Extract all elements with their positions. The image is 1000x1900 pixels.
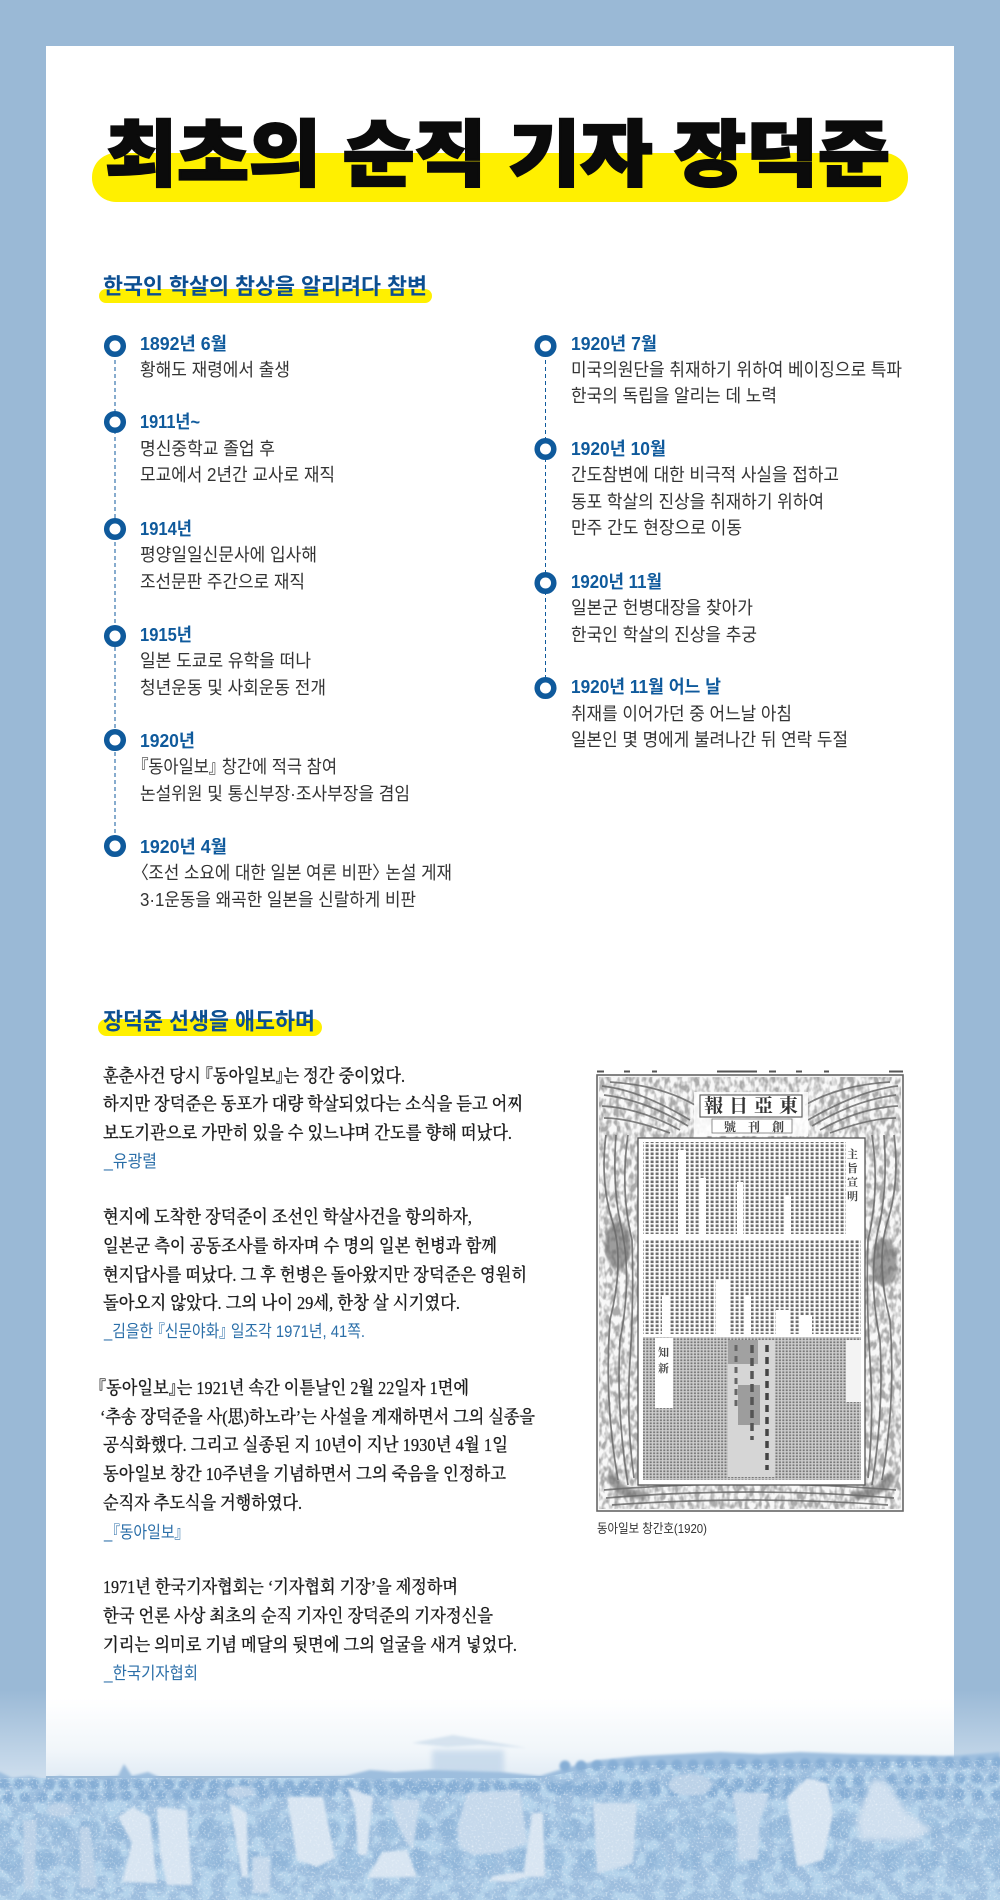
first issue box (712, 1119, 792, 1133)
newspaper caption: 동아일보 창간호(1920) (597, 1521, 707, 1536)
title highlight bar (92, 153, 908, 202)
description (571, 704, 848, 750)
description (140, 757, 410, 804)
lower right notice (846, 1340, 861, 1402)
ornamental dark dragons (605, 1221, 897, 1500)
date: 1915년 (140, 625, 192, 645)
lower left notice: 新 (658, 1360, 669, 1376)
eulogy paragraph 4 (103, 1576, 517, 1683)
eulogy paragraph 2: 일본군 측이 공동조사를 하자며 수 명의 일본 헌병과 함께 (103, 1235, 497, 1256)
event 1920 April (107, 837, 452, 910)
heading highlight (99, 289, 432, 303)
timeline left column (107, 334, 452, 910)
date: 1920년 11월 (571, 572, 662, 592)
date: 1920년 4월 (140, 837, 227, 857)
dashed timeline line left (114, 346, 116, 846)
date: 1892년 6월 (140, 334, 227, 354)
eulogy paragraph 4: 1971년 한국기자협회는 ‘기자협회 기장’을 제정하며 (103, 1576, 458, 1597)
event 1920 October (537, 439, 839, 538)
eulogy paragraph 3: 『동아일보』는 1921년 속간 이튿날인 2월 22일자 1면에 (98, 1377, 469, 1398)
description: 조선문판 주간으로 재직 (140, 572, 305, 592)
description: 청년운동 및 사회운동 전개 (140, 678, 326, 698)
description: 『동아일보』 창간에 적극 참여 (140, 757, 337, 777)
editorial notice box: 主 (847, 1146, 858, 1162)
editorial notice box: 宣 (847, 1174, 858, 1190)
top date strip (597, 1070, 903, 1072)
eulogy paragraph 1: 훈춘사건 당시 『동아일보』는 정간 중이었다. (103, 1065, 405, 1086)
side fade: right (954, 1690, 1000, 1780)
description: 평양일일신문사에 입사해 (140, 545, 317, 565)
description: 동포 학살의 진상을 취재하기 위하여 (571, 492, 824, 512)
ornamental streaks (602, 1082, 898, 1505)
marker (107, 521, 123, 537)
event 1920 July (537, 334, 902, 406)
eulogy paragraph 3: ‘추송 장덕준을 사(思)하노라’는 사설을 게재하면서 그의 실종을 (100, 1406, 536, 1428)
editorial notice box: 旨 (847, 1160, 858, 1176)
event 1914 (107, 519, 317, 592)
eulogy paragraph 4: 기리는 의미로 기념 메달의 뒷면에 그의 얼굴을 새겨 넣었다. (103, 1634, 517, 1655)
eulogy paragraph 3: 순직자 추도식을 거행하였다. (103, 1492, 302, 1513)
editorial notice box: 明 (847, 1188, 858, 1204)
masthead box (700, 1095, 802, 1117)
description (571, 598, 757, 645)
eulogy paragraph 2: 돌아오지 않았다. 그의 나이 29세, 한창 살 시기였다. (103, 1292, 460, 1313)
masthead white area (694, 1092, 808, 1136)
eulogy paragraph 2: 현지답사를 떠났다. 그 후 헌병은 돌아왔지만 장덕준은 영원히 (103, 1264, 527, 1285)
title text: 최초의 순직 기자 장덕준 (105, 116, 890, 196)
description: 만주 간도 현장으로 이동 (571, 518, 742, 538)
marker (107, 338, 123, 354)
description (140, 651, 326, 698)
column gaps (662, 1150, 812, 1338)
marker (107, 838, 123, 854)
description: 취재를 이어가던 중 어느날 아침 (571, 704, 792, 724)
eulogy paragraph 1: 하지만 장덕준은 동포가 대량 학살되었다는 소식을 듣고 어찌 (103, 1093, 523, 1114)
description: 미국의원단을 취재하기 위하여 베이징으로 특파 (571, 360, 902, 380)
title (92, 116, 908, 202)
lower left notice: 知 (658, 1344, 669, 1360)
crowd photo band (0, 1735, 1000, 1900)
description (571, 360, 902, 406)
heading: eulogy section (98, 1008, 322, 1036)
eulogy paragraph 1 (103, 1065, 523, 1171)
ornamental border texture (599, 1077, 901, 1509)
distant parasol (412, 1735, 527, 1748)
description: 일본 도쿄로 유학을 떠나 (140, 651, 311, 671)
date: 1920년 10월 (571, 439, 666, 459)
eulogy paragraph 4: 한국 언론 사상 최초의 순직 기자인 장덕준의 기자정신을 (103, 1605, 494, 1626)
lower left notice (655, 1338, 673, 1408)
heading text: 한국인 학살의 참상을 알리려다 참변 (103, 274, 427, 299)
description: 일본인 몇 명에게 불려나간 뒤 연락 두절 (571, 730, 848, 750)
crowd silhouette (0, 1752, 1000, 1900)
monument (432, 1750, 504, 1782)
marker (537, 680, 554, 696)
side fade: left (0, 1690, 46, 1780)
paper sheet (597, 1075, 903, 1511)
dashed timeline line right (544, 346, 546, 688)
middle article columns (643, 1240, 861, 1334)
event 1920 November (537, 572, 757, 645)
eulogy paragraph 3: 동아일보 창간 10주년을 기념하면서 그의 죽음을 인정하고 (103, 1463, 507, 1484)
source: 동아일보: _『동아일보』 (103, 1523, 182, 1542)
event 1911 (107, 412, 335, 485)
heading text: 장덕준 선생을 애도하며 (103, 1008, 315, 1034)
date: 1911년~ (140, 412, 200, 432)
event 1920 (107, 731, 410, 804)
description: 〈조선 소요에 대한 일본 여론 비판〉 논설 게재 (140, 863, 452, 883)
photo grain (0, 1760, 1000, 1900)
description: 간도참변에 대한 비극적 사실을 접하고 (571, 465, 839, 485)
masthead title: 報日亞東 (704, 1091, 798, 1118)
marker (537, 338, 554, 354)
standing figures in white robes (118, 1778, 833, 1893)
eulogy paragraph 1: 보도기관으로 가만히 있을 수 있느냐며 간도를 향해 떠났다. (103, 1122, 512, 1143)
date: 1920년 11월 어느 날 (571, 677, 721, 697)
marker (107, 414, 123, 430)
newspaper image: Dong-A Ilbo first issue (597, 1072, 903, 1511)
marker (537, 441, 554, 457)
heading: timeline section (99, 274, 432, 303)
eulogy paragraph 2: 현지에 도착한 장덕준이 조선인 학살사건을 항의하자, (103, 1206, 472, 1227)
description: 모교에서 2년간 교사로 재직 (140, 465, 335, 485)
pale figures, left (23, 1774, 712, 1890)
first issue text: 號刊創 (724, 1118, 784, 1135)
date: 1914년 (140, 519, 192, 539)
marker (537, 575, 554, 591)
centre calligraphy column (728, 1340, 775, 1477)
source: 김을한: _김을한 『신문야화』 일조각 1971년, 41쪽. (103, 1322, 365, 1341)
description (140, 439, 335, 485)
inner article frame (638, 1138, 865, 1485)
description: 황해도 재령에서 출생 (140, 360, 290, 380)
description (140, 863, 452, 910)
event 1892 (107, 334, 290, 380)
description (140, 545, 317, 592)
description: 한국의 독립을 알리는 데 노력 (571, 386, 777, 406)
upper article columns (643, 1142, 861, 1234)
eulogy paragraph 3 (98, 1377, 536, 1542)
marker (107, 628, 123, 644)
head rows (0, 1762, 1000, 1860)
description: 3·1운동을 왜곡한 일본을 신랄하게 비판 (140, 890, 416, 910)
event 1920 November, one day (537, 677, 848, 750)
source: 유광렬: _유광렬 (103, 1152, 157, 1171)
description: 논설위원 및 통신부장·조사부장을 겸임 (140, 784, 410, 804)
heading highlight (98, 1019, 322, 1036)
event 1915 (107, 625, 326, 698)
marker (107, 732, 123, 748)
lower article columns (643, 1337, 861, 1480)
timeline right column (537, 334, 902, 750)
date: 1920년 7월 (571, 334, 657, 354)
description: 일본군 헌병대장을 찾아가 (571, 598, 753, 618)
pale seated group, right (857, 1777, 933, 1840)
source: 한국기자협회: _한국기자협회 (103, 1664, 198, 1683)
editorial notice box (846, 1142, 861, 1234)
description: 명신중학교 졸업 후 (140, 439, 275, 459)
eulogy paragraph 3: 공식화했다. 그리고 실종된 지 10년이 지난 1930년 4월 1일 (103, 1434, 508, 1455)
crowd dark blotches (0, 1760, 1000, 1900)
date: 1920년 (140, 731, 195, 751)
description: 한국인 학살의 진상을 추궁 (571, 625, 757, 645)
eulogy paragraph 2 (103, 1206, 527, 1341)
description (571, 465, 839, 538)
